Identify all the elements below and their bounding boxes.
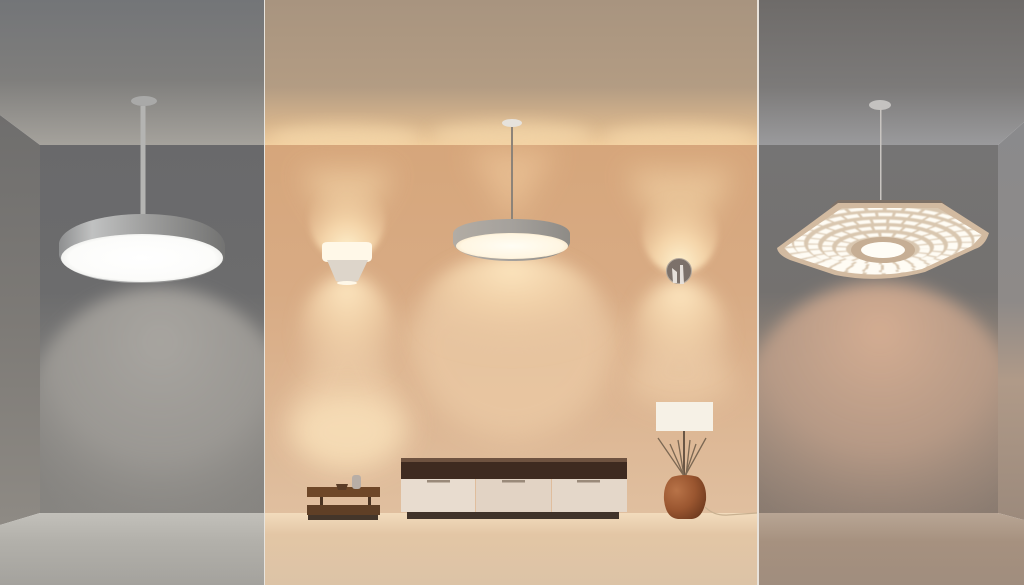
right room floor [759,513,1024,585]
drawer handles [427,480,450,482]
table lamp and vase [656,402,757,519]
bowl [336,484,348,490]
left sconce down-light [296,344,400,412]
left pendant lamp [59,96,225,283]
LED cell rings [787,208,979,274]
media console [401,458,627,519]
right wall sconce [666,258,692,284]
divider: right [757,0,759,585]
lampshade [656,402,713,431]
pendant lamp [453,119,570,261]
rod [140,106,146,216]
lamp stem [683,431,685,477]
ceiling mount [131,96,157,106]
middle wall [265,145,757,513]
middle ceiling [265,0,757,145]
left room ceiling [0,0,264,145]
lamp housing [59,214,225,283]
central ring [851,237,915,263]
glowing field [784,208,982,275]
dry branches [658,438,706,476]
ceramic vase [664,475,706,519]
sconce glowing band [322,242,372,262]
left sconce floor spot [292,394,404,470]
table top [307,487,380,497]
up-light right [630,162,730,226]
small vase [352,475,361,489]
console top [401,458,627,479]
up-light pendant [478,146,546,209]
panel: cool neutral room [0,0,264,585]
pendant down-light [404,300,620,436]
central light [861,242,905,258]
panel: patterned lamp room [740,0,1024,585]
power cord [705,507,757,515]
cord [880,108,882,200]
console base [407,512,619,519]
table legs [320,497,323,505]
left room light pool [40,281,264,498]
diffuser [456,233,568,259]
middle floor [265,513,757,585]
right room light pool [740,282,1020,558]
lower shelf [307,505,380,515]
cord [511,127,513,219]
left wall sconce [322,242,372,285]
right room side wall [998,122,1024,520]
sconce fixture [672,265,684,284]
left room back wall [40,145,264,513]
left room side wall [0,115,40,525]
console drawers [401,479,475,512]
ceiling mount [502,119,522,127]
ceiling glow [280,118,746,145]
panel: warm room [265,0,757,585]
right room ceiling [759,0,1024,145]
lamp frame [777,203,989,279]
side table [307,475,380,520]
hexagonal pendant lamp [777,100,989,279]
divider: left [264,0,266,585]
lamp diffuser [61,234,223,282]
left room floor [0,513,264,585]
lamp top edge [830,200,948,207]
up-light left [304,162,390,214]
sconce plate [666,258,692,284]
right sconce down-light [630,342,730,402]
right room back wall [759,145,998,513]
sconce body [327,260,368,283]
housing [453,219,570,261]
ceiling mount [869,100,891,110]
wall light pools [285,150,735,470]
